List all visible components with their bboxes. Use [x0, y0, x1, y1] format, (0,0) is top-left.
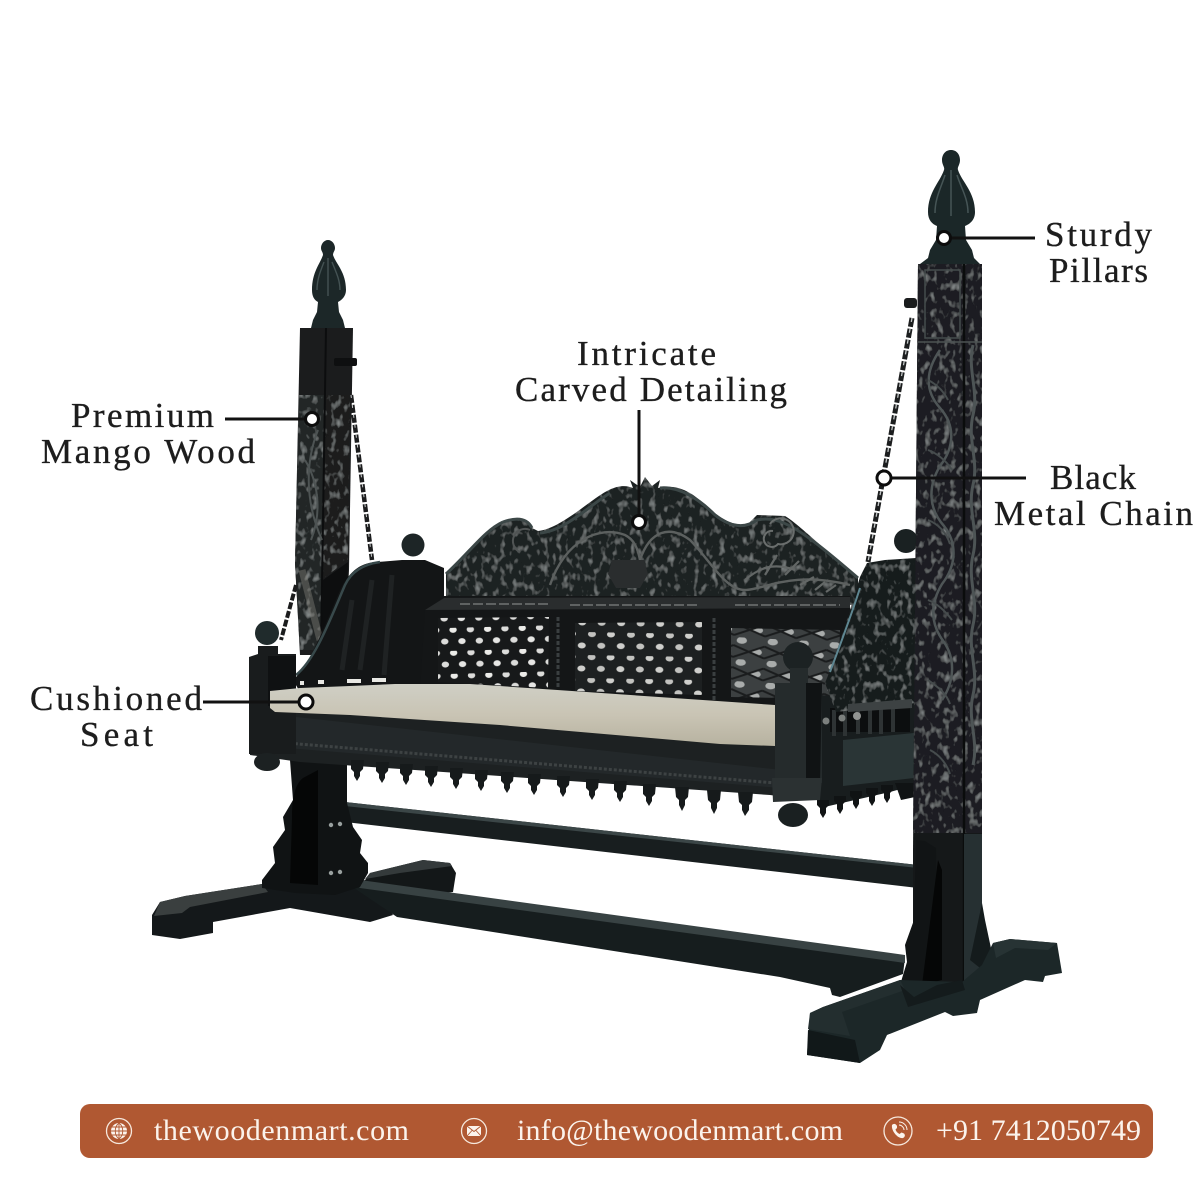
- phone number: +91 7412050749: [936, 1114, 1141, 1147]
- right seat post: [772, 642, 822, 827]
- label: carved detailing: Intricate: [577, 334, 716, 373]
- callout: cushioned seat: [30, 679, 313, 754]
- label: mango wood: Premium: [71, 396, 214, 435]
- label: carved detailing: Carved Detailing: [515, 370, 787, 409]
- label: cushioned seat: Seat: [80, 715, 153, 754]
- label: metal chain: Metal Chain: [994, 494, 1193, 533]
- callout: sturdy pillars: [938, 215, 1152, 290]
- label: sturdy pillars: Pillars: [1049, 251, 1148, 290]
- upper stretcher rail: [322, 802, 918, 888]
- left base beam: [152, 860, 456, 939]
- label: cushioned seat: Cushioned: [30, 679, 202, 718]
- left arm panel: [293, 534, 444, 692]
- right pillar: [900, 150, 982, 997]
- callout: metal chain: [877, 458, 1193, 533]
- label: metal chain: Black: [1050, 458, 1136, 497]
- callout: mango wood: [41, 396, 318, 471]
- left pedestal: [262, 760, 368, 895]
- contact bar: [80, 1104, 1153, 1158]
- long lower beam: [345, 880, 905, 997]
- lattice back panels: [418, 596, 850, 708]
- right rear seat side: [805, 695, 915, 818]
- icon: globe: [106, 1118, 132, 1144]
- callout: carved detailing: [515, 334, 787, 528]
- left chains: [281, 395, 372, 640]
- label: mango wood: Mango Wood: [41, 432, 256, 471]
- seat front apron: [249, 621, 822, 827]
- label: sturdy pillars: Sturdy: [1045, 215, 1152, 254]
- icon: envelope: [462, 1118, 486, 1144]
- website: thewoodenmart.com: [154, 1114, 409, 1147]
- icon: phone: [884, 1117, 912, 1145]
- swing illustration: [152, 150, 1062, 1063]
- right chain: [868, 318, 912, 562]
- left seat post: [249, 621, 296, 771]
- carved crest: [446, 477, 858, 605]
- right base beam: [807, 903, 1062, 1063]
- right arm panel: [825, 529, 918, 712]
- left pillar: [295, 240, 357, 655]
- cushion: [270, 684, 775, 746]
- apron finials: [351, 760, 753, 816]
- email: info@thewoodenmart.com: [517, 1114, 843, 1147]
- right rear finials: [817, 783, 915, 818]
